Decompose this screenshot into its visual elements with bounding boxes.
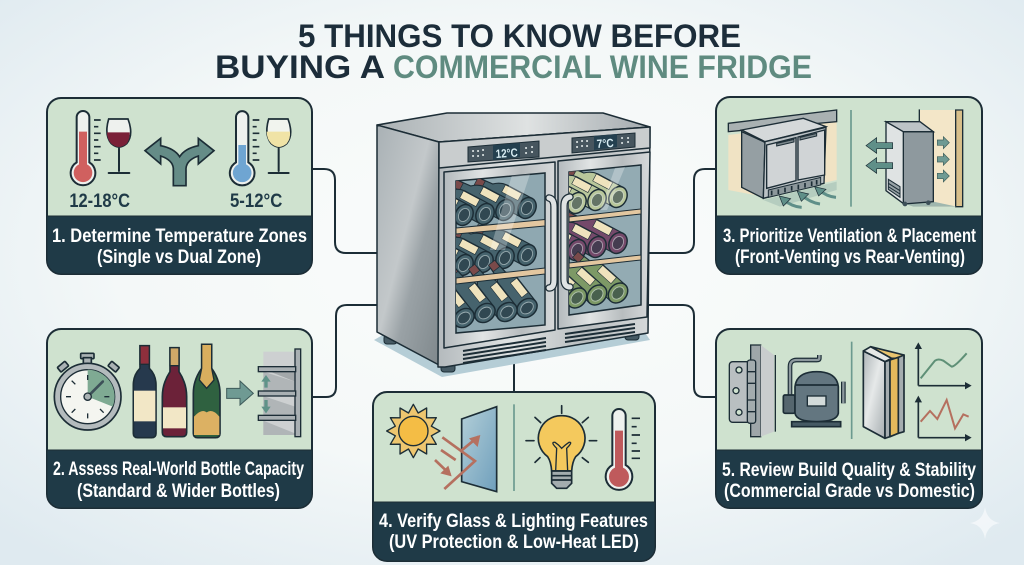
panel background xyxy=(716,97,982,274)
caption text: 1. Determine Temperature Zones xyxy=(52,225,307,247)
rear-venting cabinet and wall xyxy=(886,109,963,207)
caption band xyxy=(47,216,312,274)
ray arrowheads xyxy=(440,435,480,476)
icons: thermometers, glasses, split arrow, temperatures xyxy=(69,111,291,212)
caption text: (Front-Venting vs Rear-Venting) xyxy=(735,246,965,268)
split arrow xyxy=(145,138,214,186)
panel background xyxy=(373,392,655,561)
shelf diagram xyxy=(258,349,301,437)
sparkle xyxy=(970,507,1000,539)
fridge feet xyxy=(384,331,639,372)
stable line chart xyxy=(915,342,972,389)
caption text xyxy=(722,459,976,502)
caption text xyxy=(723,225,976,268)
caption text: (Commercial Grade vs Domestic) xyxy=(724,480,975,502)
right door xyxy=(557,151,651,330)
display left xyxy=(468,141,539,162)
right bottles xyxy=(569,167,640,309)
divider xyxy=(848,110,853,207)
caption band xyxy=(373,502,655,561)
door handles xyxy=(549,197,570,288)
icons xyxy=(54,344,301,438)
bottle: champagne xyxy=(193,344,220,438)
label red zone: 12-18°C xyxy=(69,191,130,212)
thermometer xyxy=(606,409,640,490)
fridge shadow xyxy=(374,325,650,377)
panel 1: temperature zones xyxy=(47,98,312,274)
icons xyxy=(728,109,963,207)
front-venting cabinet xyxy=(728,110,837,207)
display right xyxy=(572,133,635,153)
control band xyxy=(439,127,650,168)
caption text: 2. Assess Real-World Bottle Capacity xyxy=(53,458,304,480)
panel 2: bottle capacity xyxy=(47,329,312,508)
connector lines xyxy=(312,169,716,397)
bottle: dark red wine xyxy=(133,346,156,438)
title xyxy=(215,18,812,85)
vent grilles xyxy=(463,324,635,363)
fridge illustration xyxy=(374,113,650,377)
caption text: (Single vs Dual Zone) xyxy=(97,246,261,268)
panel background xyxy=(47,329,312,508)
unstable line chart xyxy=(915,396,972,441)
display right: 7°C xyxy=(596,136,614,151)
title: BUYING A xyxy=(215,49,385,85)
panel 5: build quality xyxy=(716,329,982,508)
arrow xyxy=(227,381,253,405)
air arrows xyxy=(783,189,836,207)
caption text: 4. Verify Glass & Lighting Features xyxy=(379,510,648,532)
UV rays xyxy=(435,437,478,489)
air arrowheads xyxy=(779,187,826,206)
divider xyxy=(849,342,854,439)
caption text xyxy=(53,458,304,502)
rear vent arrows right xyxy=(937,137,949,182)
compressor xyxy=(783,355,843,427)
fridge front xyxy=(438,127,650,367)
insulated panel xyxy=(863,347,904,438)
sun xyxy=(387,404,440,458)
fridge top xyxy=(377,113,650,142)
panel background xyxy=(716,329,982,508)
caption text xyxy=(52,225,307,268)
glass pane xyxy=(462,407,497,492)
stopwatch xyxy=(54,353,121,430)
red thermometer and wine xyxy=(71,111,131,185)
caption text xyxy=(379,510,648,553)
panel 4: glass and lighting xyxy=(373,392,655,561)
title: COMMERCIAL WINE FRIDGE xyxy=(393,49,812,85)
panel background xyxy=(47,98,312,274)
label white zone: 5-12°C xyxy=(230,191,283,212)
hinge xyxy=(729,345,775,437)
divider xyxy=(511,404,516,491)
left door xyxy=(443,161,556,349)
icons xyxy=(387,404,640,492)
title: 5 THINGS TO KNOW BEFORE xyxy=(298,18,741,54)
rear vent arrows left xyxy=(866,138,893,173)
fridge side xyxy=(377,125,439,365)
caption band xyxy=(716,450,982,508)
display left: 12°C xyxy=(495,145,518,161)
caption text: (Standard & Wider Bottles) xyxy=(77,480,280,502)
blue thermometer and white wine xyxy=(230,111,291,185)
icons xyxy=(729,342,972,441)
left bottles xyxy=(456,174,544,328)
caption band xyxy=(47,450,312,508)
panel 3: ventilation xyxy=(716,97,982,274)
light bulb xyxy=(526,406,597,488)
caption band xyxy=(716,216,982,274)
caption text: (UV Protection & Low-Heat LED) xyxy=(389,531,639,553)
bottle: burgundy xyxy=(162,348,187,437)
